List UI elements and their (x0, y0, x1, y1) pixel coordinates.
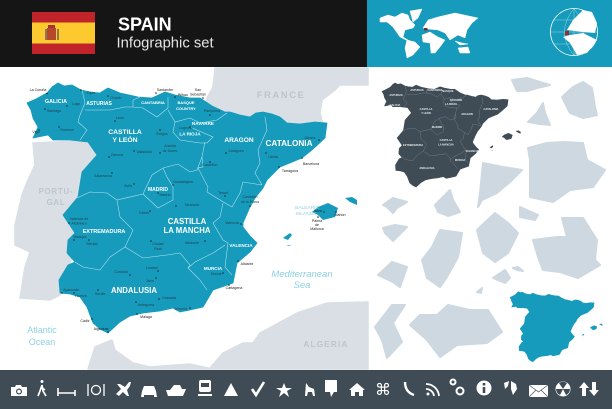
city labels: Valencia (225, 221, 239, 225)
city labels: Castellón (243, 195, 257, 199)
city labels: Ciudad (152, 242, 164, 246)
city labels: Alcántara (71, 222, 87, 226)
city labels: Madrid (160, 193, 170, 197)
icon: phone (405, 382, 414, 395)
region labels: EXTREMADURA (83, 229, 125, 235)
region: Aragon (422, 230, 462, 287)
dark map labels: MADRID (432, 125, 442, 129)
city labels: Teruel (218, 191, 228, 195)
region: Extremadura (477, 213, 518, 262)
region labels: LA MANCHA (164, 226, 211, 235)
region labels: CANTABRIA (141, 100, 165, 105)
marker: Spain on world map (424, 28, 428, 30)
icon: speech bubble (325, 380, 337, 397)
icon: car (141, 386, 157, 397)
sea labels (27, 205, 333, 347)
city labels: Gijón (87, 91, 95, 95)
city labels: de Duero (163, 149, 177, 153)
dark map labels: ASTURIAS (410, 88, 424, 92)
region: Navarre (378, 262, 407, 287)
city labels: Toledo (139, 211, 149, 215)
city labels: Ibiza (314, 209, 322, 213)
sea labels: BALEARIC (295, 205, 319, 211)
dark map labels: Y LEÓN (421, 110, 431, 115)
icon: cutlery (88, 384, 104, 396)
city labels: Granada (162, 296, 176, 300)
region labels: ASTURIAS (86, 101, 112, 107)
dark map labels: CATALONIA (484, 107, 499, 111)
icon: home (349, 383, 365, 396)
city labels (30, 88, 346, 331)
city labels: Valencia de (70, 217, 88, 221)
region: La Rioja (520, 207, 538, 220)
title: SPAIN (118, 14, 172, 34)
region: Madrid (528, 103, 550, 125)
icon: RSS (426, 384, 439, 396)
country labels: GAL (47, 198, 65, 207)
city labels: Lleida (268, 155, 278, 159)
city labels: Mallorca (310, 227, 324, 231)
region labels: GALICIA (45, 99, 67, 105)
city labels: Cartagena (226, 286, 242, 290)
city labels: Girona (305, 136, 315, 140)
dark map labels: LA MANCHA (438, 142, 454, 146)
city labels: Aranda (164, 144, 176, 148)
icon: tent (224, 383, 238, 396)
land: France (200, 68, 368, 125)
world map (380, 9, 478, 58)
region labels: CATALONIA (266, 139, 313, 148)
dark map labels: VALENCIA (465, 149, 479, 153)
icon: plane (116, 382, 131, 396)
city labels: Sevilla (95, 292, 105, 296)
dark map labels: MURCIA (455, 158, 465, 162)
city labels: Santander (157, 88, 174, 92)
icon: ship (166, 385, 186, 396)
region labels: VALENCIA (229, 243, 253, 248)
blue Spain silhouette (510, 292, 602, 362)
region labels: MURCIA (204, 266, 223, 271)
icon: check (252, 382, 264, 395)
dark map labels: CANTABRIA (427, 88, 443, 92)
region: Castilla y León (528, 142, 605, 202)
region labels: COUNTRY (176, 106, 196, 111)
city labels: Vigo (32, 130, 40, 134)
city labels: Valladolid (136, 150, 152, 154)
icon: deer (305, 383, 315, 396)
region: Murcia (435, 190, 460, 216)
city labels: Bilbao (178, 93, 188, 97)
icon: flag of Spain (32, 12, 95, 54)
city labels: Tarancón (185, 203, 199, 207)
dark map labels: CASTILLA (440, 138, 453, 142)
icon: gears (450, 380, 464, 394)
city labels: Burgos (156, 132, 168, 136)
sea labels: Sea (294, 280, 310, 291)
header: world locator panel (367, 0, 612, 67)
dark map labels: CASTILLA (420, 107, 433, 111)
icon: info (476, 380, 492, 396)
city labels: Jaén (146, 279, 154, 283)
icon: envelope (529, 385, 548, 397)
sea labels: Atlantic (27, 325, 57, 335)
icon: walker (38, 380, 46, 396)
land: Algeria (210, 302, 368, 369)
Spain regions map (27, 83, 357, 333)
dark map labels: LA RIOJA (445, 102, 457, 106)
country labels (39, 90, 349, 349)
city markers (38, 89, 337, 333)
globe (550, 8, 598, 56)
city labels: Mérida (86, 242, 98, 246)
dark map labels: GALICIA (390, 103, 400, 107)
individual region silhouettes (375, 78, 605, 358)
city labels: San (195, 88, 201, 92)
city labels: Alicante (241, 262, 253, 266)
city labels: de la Plana (241, 200, 259, 204)
city labels: Oviedo (110, 96, 122, 100)
city labels: Linares (146, 266, 158, 270)
dark map labels: ASTURIAS (389, 93, 403, 97)
city labels: Albacete (185, 241, 199, 245)
city labels: Algeciras (94, 327, 109, 331)
city labels: Logroño (179, 126, 193, 130)
city labels: Castellón (203, 163, 217, 167)
main map panel (15, 68, 368, 369)
region labels: LA RIOJA (179, 132, 201, 136)
land: Portugal (15, 140, 100, 300)
city labels: Palma (312, 219, 322, 223)
region labels: ARAGON (224, 137, 254, 144)
dark map labels: EXTREMADURA (403, 143, 423, 147)
icon: globe (504, 381, 517, 395)
city labels: Zamora (111, 153, 123, 157)
city labels: Guadalajara (173, 180, 193, 184)
city labels: Real (154, 247, 162, 251)
land: Morocco (88, 340, 212, 369)
city labels: Cádiz (80, 319, 90, 323)
subtitle: Infographic set (116, 36, 214, 52)
region labels: CASTILLA (108, 129, 142, 136)
city labels: Mahón (334, 213, 346, 217)
city labels: Badajoz (74, 235, 87, 239)
city labels: Sebastián (190, 92, 206, 96)
region: Basque Country (383, 198, 407, 213)
country labels: ALGERIA (303, 340, 349, 349)
icon: up and down arrows (579, 382, 599, 396)
city labels: Ayamonte (63, 288, 79, 292)
city labels: Pamplona (204, 109, 220, 113)
header: title band (0, 0, 367, 67)
city labels: Antequera (138, 303, 154, 307)
region: Castilla-La Mancha (533, 218, 600, 278)
footer icon bar (0, 370, 612, 409)
sea labels: Mediterranean (271, 269, 333, 280)
city labels: Barcelona (303, 162, 319, 166)
icon: command: ⌘ (375, 380, 391, 399)
dark regions map (382, 83, 521, 187)
region: Galicia (562, 82, 597, 118)
sea labels: Ocean (29, 337, 55, 347)
city labels: de (315, 223, 319, 227)
dark map labels: ANDALUSIA (419, 166, 435, 170)
city labels: Córdoba (114, 270, 128, 274)
dark map labels: NAVARRE (450, 98, 462, 102)
country labels: PORTU- (39, 187, 73, 196)
region: Catalonia (478, 163, 522, 207)
city labels: Ourense (60, 128, 74, 132)
city labels: La Coruña (30, 88, 46, 92)
region labels: BASQUE (177, 100, 195, 105)
region: Balearic Islands (477, 267, 523, 293)
region: Cantabria small (383, 225, 407, 241)
city labels: Tarragona (282, 169, 298, 173)
region labels: CASTILLA (168, 217, 207, 226)
sea labels: ISLANDS (296, 211, 316, 217)
region: Asturias (512, 78, 550, 91)
region labels: NAVARRE (192, 121, 214, 126)
dark map labels (389, 88, 499, 170)
country labels: FRANCE (257, 90, 305, 101)
city labels: Santiago (47, 109, 61, 113)
city labels: Zaragoza (228, 149, 244, 153)
region labels: ANDALUSIA (111, 286, 157, 295)
region labels: MADRID (148, 187, 168, 193)
icon: star (276, 383, 292, 397)
region: Andalusia (410, 305, 502, 357)
city labels: Almería (175, 307, 187, 311)
icon: train (198, 380, 212, 396)
dark map labels: ARAGON (461, 112, 473, 116)
icon: radiation (556, 382, 570, 396)
city labels: Lugo (72, 102, 80, 106)
dark map labels: BASQUE (442, 89, 454, 93)
city labels: Salamanca (94, 174, 112, 178)
region labels: Y LEÓN (112, 135, 138, 144)
icon: camera (11, 385, 27, 396)
city labels: Ávila (124, 184, 132, 188)
region labels (45, 99, 313, 295)
city labels: Huelva (75, 294, 87, 298)
city labels: León (116, 116, 124, 120)
region: Valencia (375, 305, 405, 358)
city labels: Málaga (140, 315, 152, 319)
icon: bed (58, 388, 75, 396)
city labels: Murcia (211, 272, 221, 276)
